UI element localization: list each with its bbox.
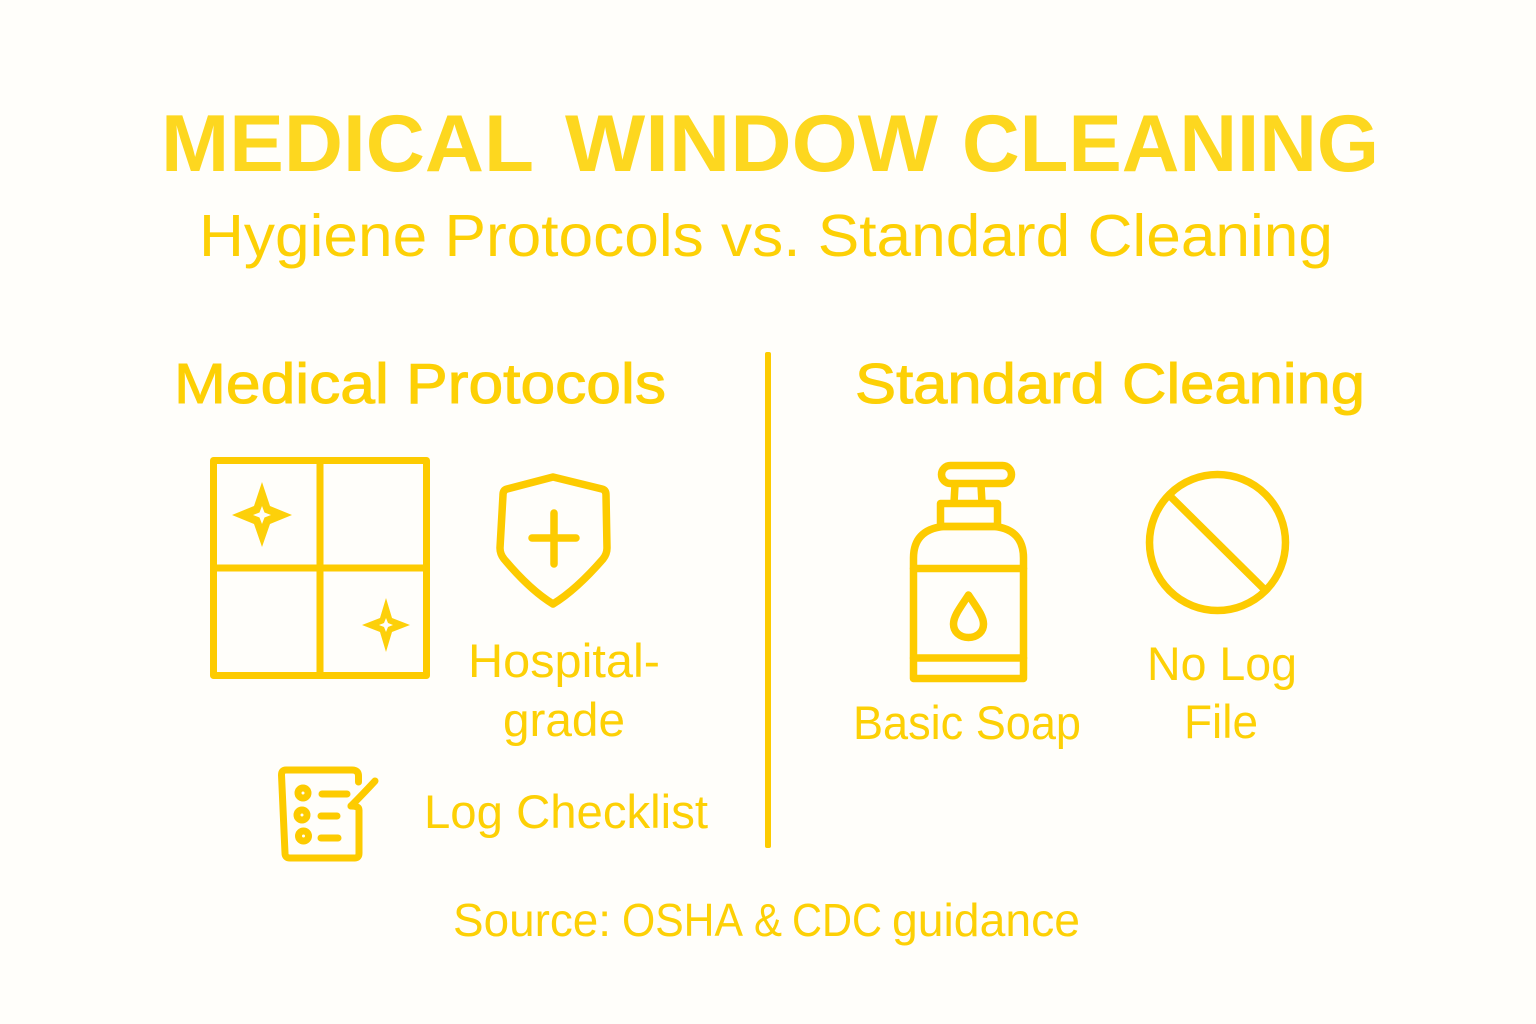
- source note: guidance: [892, 894, 1080, 946]
- subtitle: Hygiene Protocols vs. Standard Cleaning: [199, 203, 1333, 269]
- heading: medical protocols: Medical Protocols: [174, 352, 666, 416]
- label: no log file: [1147, 637, 1297, 748]
- source note: Source:: [453, 894, 611, 946]
- label: hospital-grade: grade: [503, 693, 625, 746]
- label: no log file: No Log: [1147, 637, 1297, 690]
- source note: OSHA: [622, 894, 743, 946]
- icon: clean window: [213, 460, 427, 676]
- center divider: [765, 352, 771, 848]
- heading: standard cleaning: Standard Cleaning: [855, 352, 1365, 416]
- label: basic soap: Basic Soap: [853, 696, 1081, 749]
- icon: log checklist: [282, 770, 375, 858]
- icon: medical shield: [500, 477, 607, 604]
- title: MEDICAL: [161, 99, 534, 189]
- icon: soap bottle: [914, 466, 1024, 678]
- icon: prohibited sign: [1150, 474, 1286, 610]
- icon: sparkle small: [362, 598, 410, 652]
- title: CLEANING: [962, 99, 1379, 189]
- title: [161, 99, 1379, 189]
- label: hospital-grade: [468, 634, 660, 746]
- label: no log file: File: [1184, 695, 1258, 748]
- label: log checklist: Log Checklist: [424, 785, 708, 838]
- source note: [453, 894, 1080, 946]
- source note: CDC: [792, 894, 882, 946]
- icon: sparkle large: [232, 482, 292, 547]
- source note: &: [754, 894, 782, 946]
- title: WINDOW: [565, 99, 939, 189]
- label: hospital-grade: Hospital-: [468, 634, 660, 687]
